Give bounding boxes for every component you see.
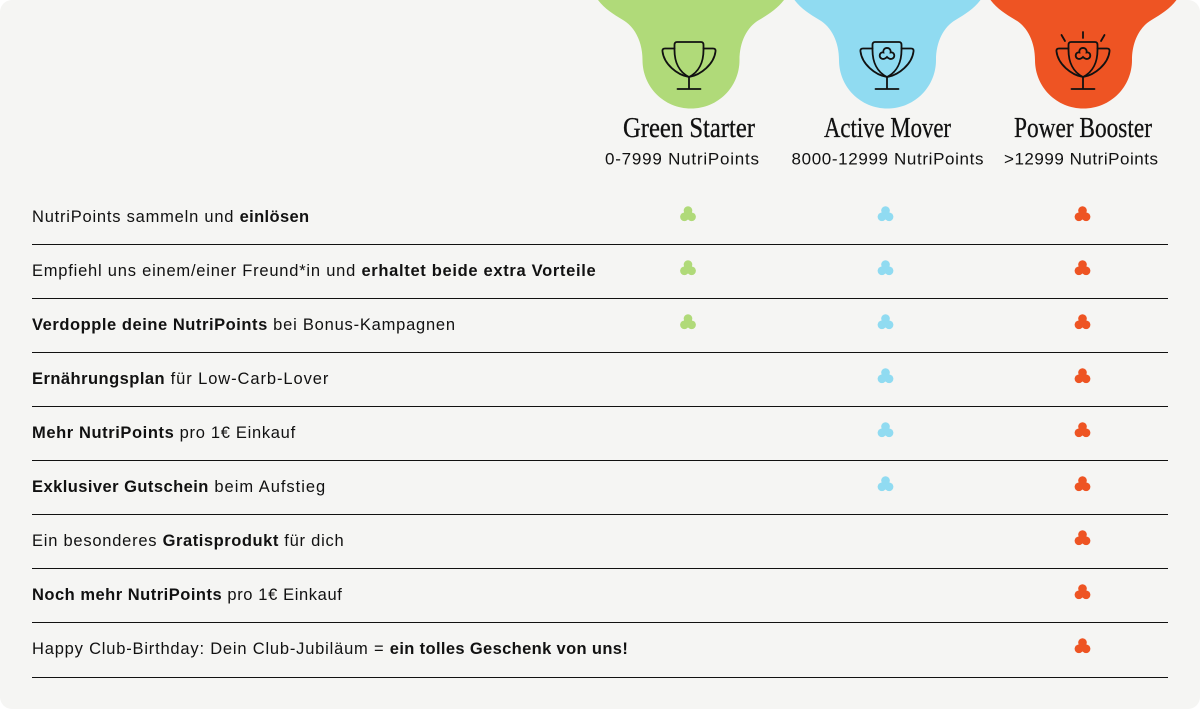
heading: Green Starter: Green Starter (623, 112, 755, 144)
text: Green Starter points: 0-7999 NutriPoints (605, 150, 759, 168)
checks: Active Mover column (878, 206, 893, 491)
row 7: Ein besonderes Gratisprodukt für dich (32, 532, 344, 550)
text: Power Booster points: >12999 NutriPoints (1004, 150, 1158, 168)
text: Active Mover points: 8000-12999 NutriPoints (792, 150, 984, 168)
row 2: Empfiehl uns einem/einer Freund*in und erhaltet beide extra Vorteile (32, 262, 596, 280)
row 5 (32, 407, 1168, 461)
row 1 (32, 191, 1168, 245)
row 5: Mehr NutriPoints pro 1€ Einkauf (32, 424, 296, 442)
row 2 (32, 245, 1168, 299)
row 7 (32, 515, 1168, 569)
row 1: NutriPoints sammeln und einlösen (32, 208, 309, 226)
row 3: Verdopple deine NutriPoints bei Bonus-Kampagnen (32, 316, 456, 334)
row 8: Noch mehr NutriPoints pro 1€ Einkauf (32, 586, 342, 604)
row 4 (32, 353, 1168, 407)
row 8 (32, 569, 1168, 623)
panel: Active Mover badge (794, 0, 980, 108)
row 9: Happy Club-Birthday: Dein Club-Jubiläum = ein tolles Geschenk von uns! (32, 640, 628, 658)
row 6 (32, 461, 1168, 515)
row 3 (32, 299, 1168, 353)
panel: Green Starter badge (598, 0, 784, 108)
heading: Active Mover: Active Mover (824, 112, 951, 144)
checks: Power Booster column (1075, 206, 1090, 653)
row 4: Ernährungsplan für Low-Carb-Lover (32, 370, 329, 388)
checks: Green Starter column (680, 206, 696, 329)
panel: Power Booster badge (990, 0, 1176, 108)
row 9 (32, 624, 1168, 678)
row 6: Exklusiver Gutschein beim Aufstieg (32, 478, 326, 496)
heading: Power Booster: Power Booster (1014, 112, 1152, 144)
